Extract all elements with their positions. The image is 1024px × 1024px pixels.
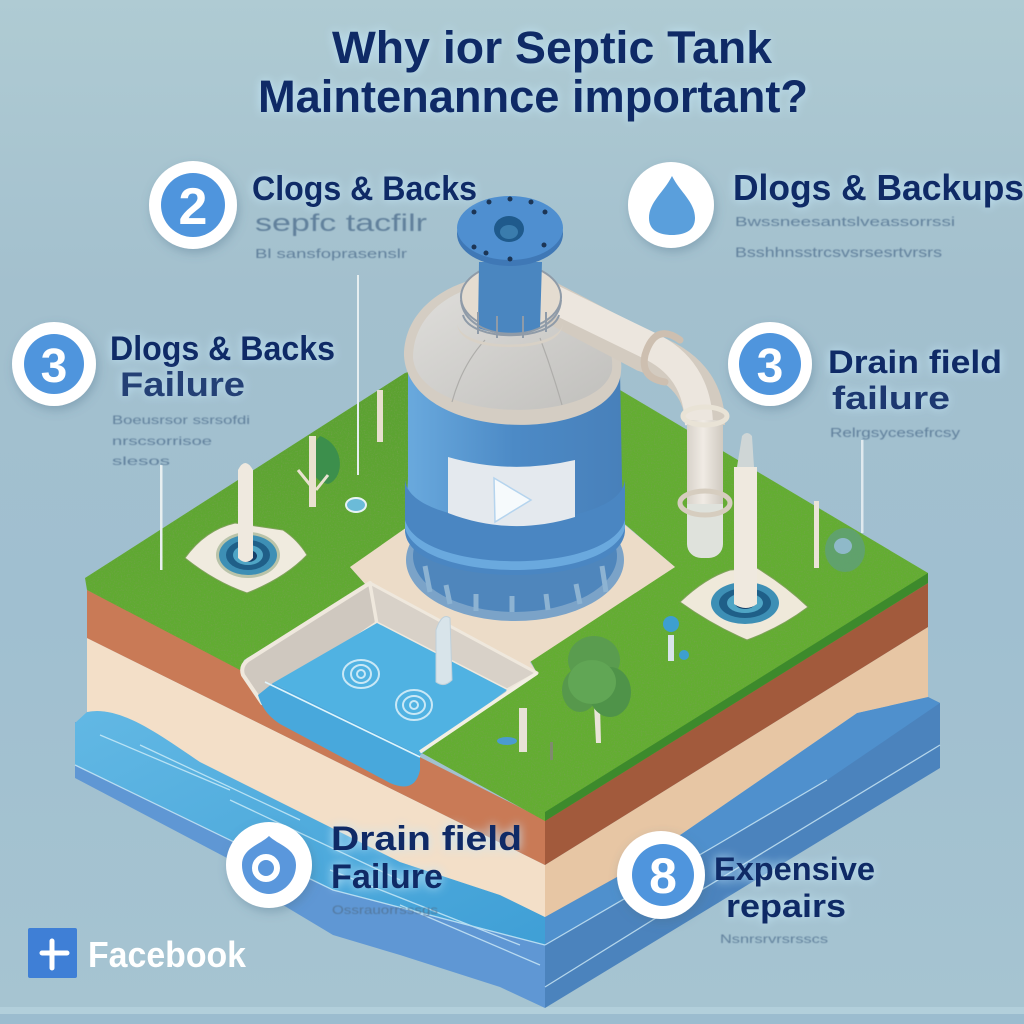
badge 8: 8 (649, 848, 677, 904)
callout: expensive repairs (617, 831, 875, 946)
callout: clogs and backs: Bl sansfoprasenslr (255, 246, 408, 261)
callout: drain field failure bottom: Ossrauorrsssgs (332, 903, 438, 917)
neck (478, 262, 542, 334)
septic tank (404, 196, 730, 621)
left face base water layer (75, 722, 545, 1008)
callout: dlogs and backs failure: nrscsorrisoe (112, 434, 212, 448)
title (258, 22, 808, 122)
right drain with pole (680, 433, 808, 640)
pipe collars (680, 491, 730, 515)
callout: clogs and backs: sepfc tacfilr (255, 210, 427, 237)
guard rail back (461, 264, 561, 330)
callout: drain field failure right: failure (832, 380, 950, 416)
excavated pool with water (242, 583, 537, 786)
sand layer left (87, 638, 545, 917)
play icon (494, 478, 531, 522)
callout: dlogs and backs failure: slesos (112, 454, 170, 468)
right face base water layer (545, 697, 940, 1008)
grass: right field (420, 340, 928, 821)
small poles and markers (160, 275, 864, 760)
icon: ring in water drop badge (226, 822, 312, 908)
callout: drain field failure right (728, 322, 1002, 440)
callout: expensive repairs: repairs (726, 888, 846, 924)
dome (404, 278, 621, 425)
pool wall left (242, 583, 377, 703)
flange (457, 196, 563, 266)
callout: drain field failure bottom: Failure (331, 858, 443, 896)
callout: drain field failure right: Drain field (828, 344, 1002, 380)
icon: plus square (28, 928, 77, 978)
footer: Facebook badge (28, 928, 247, 978)
pool wall back (370, 583, 537, 690)
footer: Facebook badge: Facebook (88, 934, 247, 975)
callout: expensive repairs: Nsnrsrvrsrsscs (720, 932, 828, 946)
ground block: isometric soil cross-section (75, 340, 940, 1008)
badge 3: 3 (757, 340, 783, 393)
badge 2: 2 (179, 178, 207, 236)
small bush right (825, 528, 865, 572)
brown soil right (545, 583, 928, 865)
title: Maintenannce important? (258, 71, 808, 122)
badge 2 (149, 161, 237, 249)
callout: dlogs and backups: Dlogs & Backups (733, 167, 1024, 208)
title: Why ior Septic Tank (332, 22, 773, 73)
badge 3 (12, 322, 96, 406)
icon: water drop badge (628, 162, 714, 248)
water front face (258, 683, 420, 786)
small leafy tree left (298, 436, 340, 507)
callout: expensive repairs: Expensive (714, 851, 875, 887)
callout: clogs and backs (149, 161, 477, 261)
round tree (562, 636, 631, 743)
lower pipe end (687, 490, 723, 558)
callout: dlogs and backs failure: Boeusrsor ssrsofdi (112, 413, 250, 427)
badge 8 (617, 831, 705, 919)
concrete platform under tank (350, 525, 675, 673)
grass: left field (85, 340, 520, 670)
callout: dlogs and backups: Bsshhnsstrcsvsrsesrtvrsrs (735, 244, 942, 260)
tank lower band (405, 478, 625, 575)
badge 3 (728, 322, 812, 406)
left drain with pole (185, 463, 307, 593)
callout: dlogs and backs failure: Failure (120, 366, 245, 404)
callout: drain field failure right: Relrgsycesefrcsy (830, 425, 961, 440)
right water surface (545, 697, 940, 945)
guard rail front (461, 300, 561, 338)
tank body (405, 370, 624, 564)
collar ring (457, 322, 563, 347)
outflow pipe (535, 290, 730, 558)
callout: clogs and backs: Clogs & Backs (252, 170, 477, 208)
tank base ring (406, 499, 624, 621)
tank label with play icon (448, 457, 575, 526)
sand layer right (545, 627, 928, 917)
wave highlights (75, 735, 940, 987)
overflow pipe (436, 616, 452, 685)
water swirls (343, 660, 432, 720)
callout: dlogs and backs failure (12, 322, 335, 468)
light water surface on left face (75, 711, 545, 945)
callout: dlogs and backups (628, 162, 1024, 260)
water surface (273, 623, 507, 755)
brown soil left (87, 590, 545, 865)
callout: drain field failure bottom: Drain field (331, 820, 522, 858)
badge 3: 3 (41, 340, 67, 393)
callout: dlogs and backs failure: Dlogs & Backs (110, 330, 335, 368)
callout: dlogs and backups: Bwssneesantslveassorrssi (735, 214, 955, 229)
callout: drain field failure bottom (226, 820, 522, 917)
